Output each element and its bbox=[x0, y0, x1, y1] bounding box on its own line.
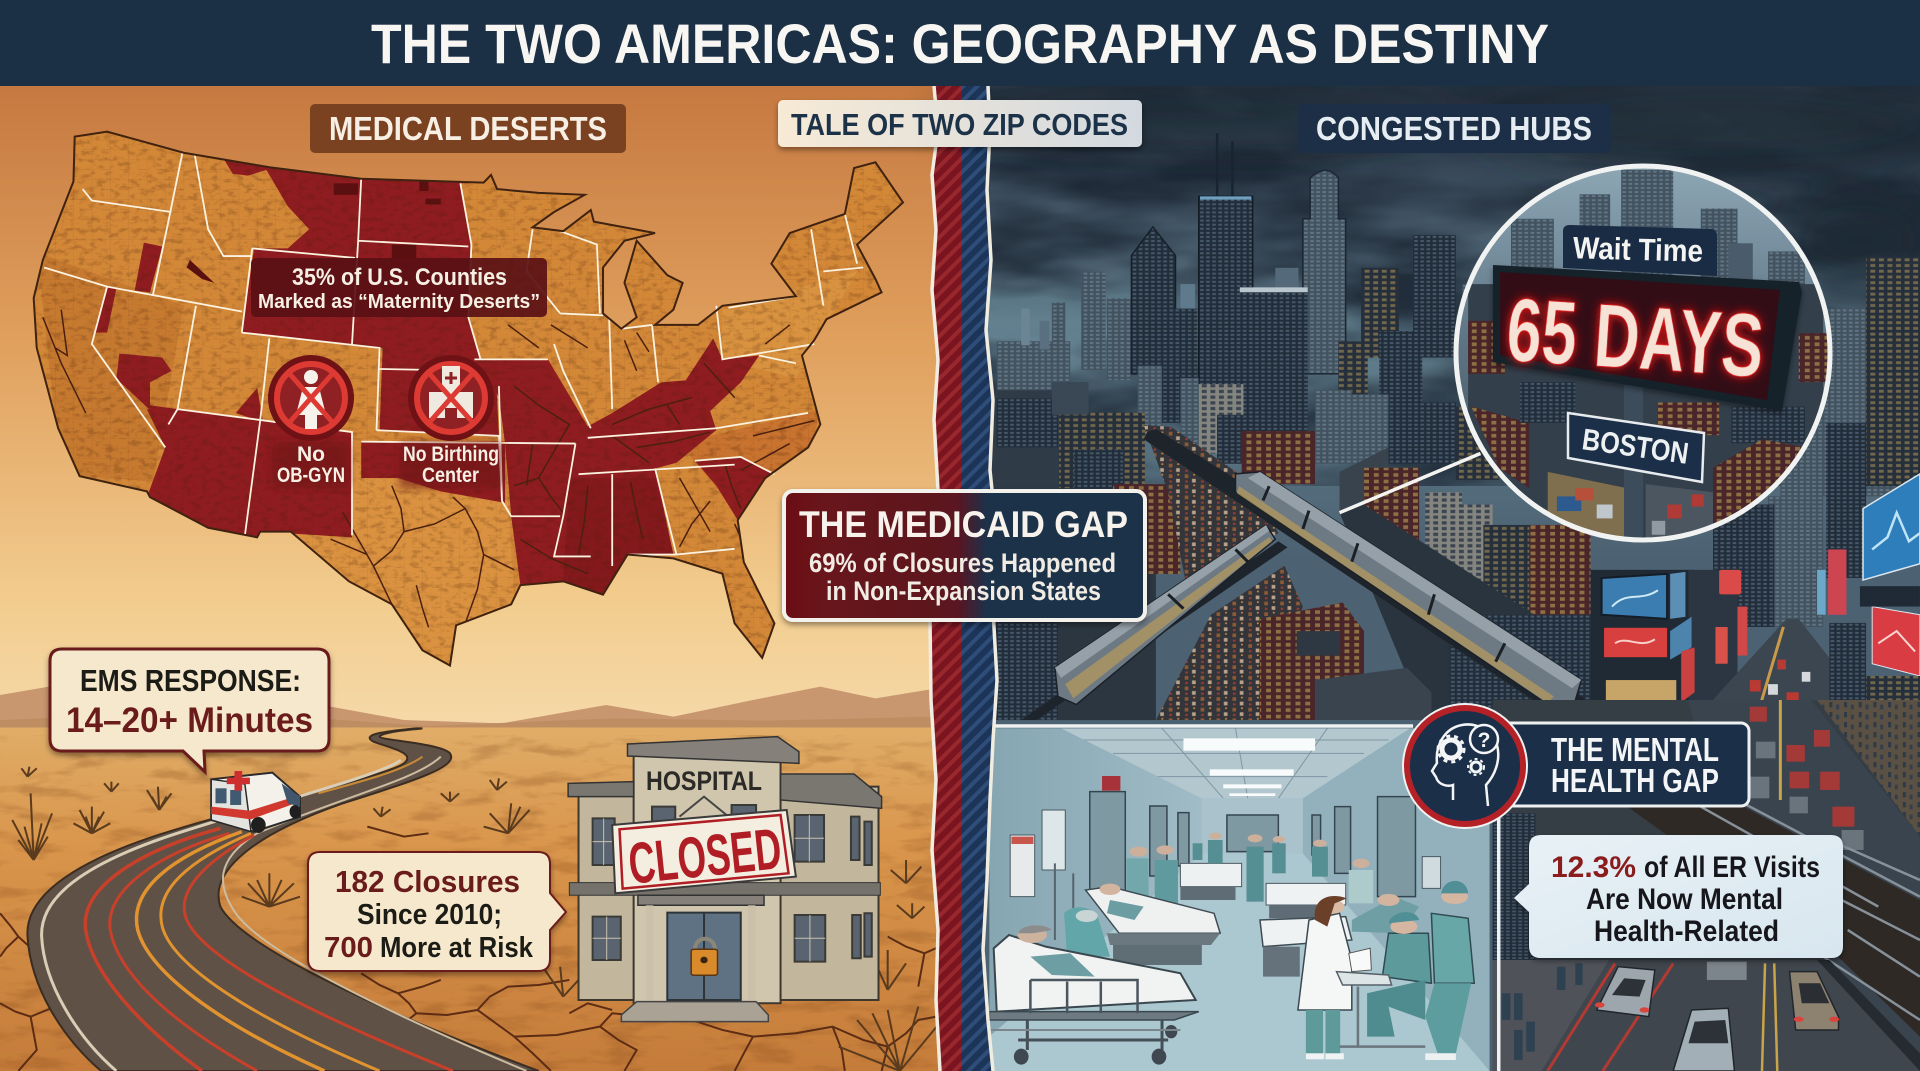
winding road bbox=[27, 728, 539, 1071]
drought cracks bbox=[43, 310, 814, 627]
icon: no birthing center bbox=[408, 355, 494, 441]
heading: Congested Hubs bbox=[1298, 104, 1611, 153]
distant beds and staff bbox=[1127, 833, 1373, 918]
callout: the Medicaid gap: THE MEDICAID GAP bbox=[799, 504, 1128, 545]
ambulance bbox=[211, 771, 301, 833]
lit streets under the rail bbox=[1144, 425, 1389, 720]
closed hospital building bbox=[568, 737, 882, 1022]
red stripes bbox=[930, 86, 962, 1071]
text: closed sign: CLOSED bbox=[625, 816, 784, 897]
right panel background: stormy sky bbox=[950, 86, 1920, 1071]
state lines bbox=[44, 153, 863, 566]
circle frame bbox=[1456, 166, 1830, 540]
callout: EMS response bbox=[50, 649, 329, 772]
65 days value: 65 DAYS bbox=[1504, 280, 1767, 397]
desert shrubs bbox=[12, 767, 937, 1071]
callout: 35% maternity deserts: Marked as “Maternity Deserts” bbox=[258, 291, 540, 313]
ceiling bbox=[1061, 728, 1410, 798]
mid-level dense blocks bbox=[960, 382, 1499, 720]
storefront strip bbox=[1493, 813, 1535, 960]
cars bbox=[1595, 962, 1839, 1071]
circle scene bbox=[1458, 168, 1828, 538]
maternity desert regions bbox=[95, 158, 774, 595]
magnifier connector line bbox=[1340, 454, 1480, 513]
label: No Birthing Center: No Birthing bbox=[403, 443, 499, 466]
sign pole bbox=[1624, 385, 1643, 545]
callout: hospital closures: Since 2010; bbox=[357, 899, 502, 931]
mid-left patient bed bbox=[1064, 884, 1220, 965]
label: No Birthing Center: Center bbox=[422, 464, 479, 487]
blocks right of the rail bbox=[1340, 468, 1591, 720]
callout: hospital closures: More at Risk bbox=[380, 932, 534, 964]
label: No OB-GYN: OB-GYN bbox=[277, 464, 345, 487]
callout: the Medicaid gap: 69% of Closures Happened bbox=[809, 548, 1116, 578]
mid-right patient bed bbox=[1260, 894, 1419, 977]
illustration: central torn-paper divider bbox=[930, 86, 997, 1071]
Boston street sign bbox=[1568, 413, 1704, 482]
street base bbox=[1493, 700, 1920, 1071]
left panel background: desert ground bbox=[0, 727, 950, 1071]
map outline bbox=[34, 132, 903, 666]
heading: Tale of Two Zip Codes: TALE OF TWO ZIP CODES bbox=[791, 107, 1128, 142]
callout: the Medicaid gap bbox=[784, 491, 1145, 620]
label: No Birthing Center bbox=[399, 442, 503, 488]
callout: the Medicaid gap: in Non-Expansion States bbox=[826, 576, 1101, 606]
label: No OB-GYN bbox=[272, 442, 350, 488]
callout: hospital closures: 182 Closures bbox=[335, 864, 520, 899]
callout: 12.3% of ER visits: 12.3% bbox=[1551, 851, 1636, 884]
pyramid-top tower bbox=[1131, 227, 1175, 374]
road speed trails bbox=[85, 757, 453, 1071]
callout: EMS response: 14–20+ Minutes bbox=[66, 701, 313, 740]
heading: Medical Deserts: MEDICAL DESERTS bbox=[329, 110, 607, 147]
Boston street sign: BOSTON bbox=[1580, 423, 1691, 471]
heading: the mental health gap bbox=[1500, 723, 1749, 806]
left panel background: desert sky bbox=[0, 86, 950, 728]
illustration: congested city skyline bbox=[960, 133, 1920, 720]
right side skyscrapers bbox=[1713, 258, 1920, 627]
county grid bbox=[35, 134, 900, 660]
panel backdrop bbox=[989, 728, 1490, 1071]
callout: hospital closures: 700 bbox=[324, 932, 373, 964]
desert mountains bbox=[0, 687, 937, 727]
ground cracks bbox=[0, 827, 955, 1071]
heading: Congested Hubs: CONGESTED HUBS bbox=[1316, 110, 1592, 147]
LED billboard bbox=[1493, 265, 1802, 411]
elevated rail and trains bbox=[1021, 429, 1584, 720]
round tower bbox=[1303, 170, 1346, 374]
callout: 12.3% of ER visits bbox=[1514, 835, 1843, 958]
traffic lanes bbox=[1779, 700, 1782, 800]
map: United States maternity deserts bbox=[32, 130, 904, 668]
standing nurse bbox=[1425, 881, 1474, 1060]
front patient bed bbox=[989, 925, 1199, 1065]
heading: the mental health gap: HEALTH GAP bbox=[1551, 762, 1719, 799]
callout: hospital closures bbox=[308, 852, 566, 971]
corner buildings bbox=[1260, 570, 1737, 720]
navy stripes bbox=[962, 86, 997, 1071]
map base bbox=[34, 133, 902, 664]
zoom circle: Boston wait-time billboard bbox=[1450, 160, 1840, 550]
label: No OB-GYN: No bbox=[297, 443, 325, 466]
title banner: THE TWO AMERICAS: GEOGRAPHY AS DESTINY bbox=[371, 12, 1549, 75]
callout: 12.3% of ER visits: Health-Related bbox=[1594, 915, 1779, 948]
text: hospital name on building: HOSPITAL bbox=[646, 766, 762, 796]
seated nurse with cart bbox=[1337, 912, 1431, 1047]
icon: head with gears and question mark bbox=[1402, 703, 1528, 829]
icon: head with gears and question mark: ? bbox=[1478, 729, 1490, 752]
callout: EMS response: EMS RESPONSE: bbox=[80, 663, 301, 698]
callout: 12.3% of ER visits: of All ER Visits bbox=[1644, 851, 1820, 884]
illustration: right-hand street below ER panel bbox=[1493, 700, 1920, 1071]
white torn edges bbox=[930, 86, 997, 1071]
padlock bbox=[691, 939, 717, 975]
pedestrians bbox=[1502, 963, 1583, 1060]
antenna tower bbox=[1199, 133, 1253, 392]
walls bbox=[990, 728, 1178, 1035]
midtown towers bbox=[1138, 235, 1456, 456]
heading: the mental health gap: THE MENTAL bbox=[1551, 731, 1719, 768]
mottled texture bbox=[35, 132, 902, 663]
heading: Medical Deserts bbox=[310, 104, 626, 153]
doors and wall details bbox=[1090, 792, 1415, 897]
panel frame bbox=[989, 726, 1499, 1071]
lower roadway bbox=[1542, 960, 1920, 1071]
doctor in white coat bbox=[1298, 896, 1371, 1059]
billboards bbox=[1602, 474, 1920, 720]
heading: Tale of Two Zip Codes bbox=[778, 100, 1142, 147]
street canyon with traffic bbox=[1695, 570, 1878, 720]
floor bbox=[992, 1021, 1490, 1071]
callout: 35% maternity deserts: 35% of U.S. Counties bbox=[292, 264, 507, 291]
icon: no OB-GYN bbox=[268, 355, 354, 441]
panel: overcrowded ER hallway scene bbox=[989, 726, 1499, 1071]
illustration: storm clouds bbox=[940, 80, 1920, 506]
closed sign board bbox=[612, 810, 796, 893]
distant buildings bbox=[997, 268, 1903, 496]
wait time tab: Wait Time bbox=[1573, 230, 1703, 269]
callout: 12.3% of ER visits: Are Now Mental bbox=[1586, 883, 1783, 916]
elevated tracks bbox=[1627, 807, 1920, 1037]
desert soil texture bbox=[0, 735, 950, 1071]
callout: 35% maternity deserts bbox=[251, 258, 547, 317]
illustration: desert landscape with road, ambulance and cracks bbox=[0, 687, 955, 1071]
title banner bbox=[0, 0, 1920, 86]
